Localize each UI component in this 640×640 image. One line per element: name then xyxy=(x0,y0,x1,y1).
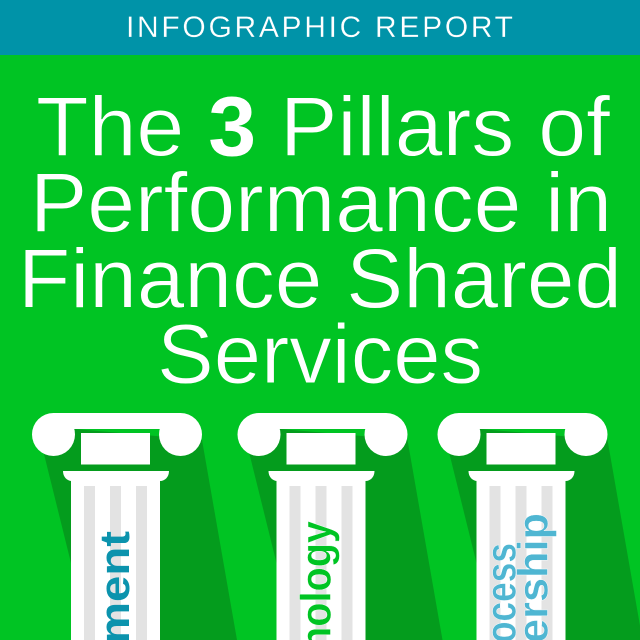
pillar 3 flutes xyxy=(490,486,552,640)
pillar 1 flutes xyxy=(84,486,147,640)
pillar 2 abacus xyxy=(268,471,374,481)
pillar 2 shaft xyxy=(276,480,366,640)
header banner xyxy=(0,0,640,55)
pillar 2 xyxy=(238,413,442,640)
pillar 1 abacus xyxy=(63,471,169,481)
pillar 3 label: ocess xyxy=(478,543,526,640)
pillar 3 capital xyxy=(438,413,608,456)
header banner: INFOGRAPHIC REPORT xyxy=(126,11,513,44)
pillar 3 shadow xyxy=(448,429,640,640)
pillar 1 shadow xyxy=(43,429,237,640)
pillar 2 flutes xyxy=(290,486,352,640)
pillar 1 shaft xyxy=(71,480,160,640)
pillar 1 xyxy=(32,413,237,640)
title: Performance in xyxy=(30,156,612,250)
title: The 3 Pillars of xyxy=(36,80,611,174)
pillar 2 shadow xyxy=(248,429,442,640)
title xyxy=(18,80,622,401)
pillar 1 neck xyxy=(81,433,150,464)
pillar 1 capital xyxy=(32,413,202,456)
pillar 3 shaft xyxy=(476,480,566,640)
pillar 3 label: ership xyxy=(510,513,558,640)
pillar 3 xyxy=(438,413,640,640)
pillar 3 neck xyxy=(486,433,556,464)
pillar 2 capital xyxy=(238,413,408,456)
pillar 3 label xyxy=(478,513,558,640)
pillar 3 abacus xyxy=(468,471,574,481)
title: Services xyxy=(157,307,483,401)
pillar 2 neck xyxy=(286,433,356,464)
title: Finance Shared xyxy=(18,232,622,326)
